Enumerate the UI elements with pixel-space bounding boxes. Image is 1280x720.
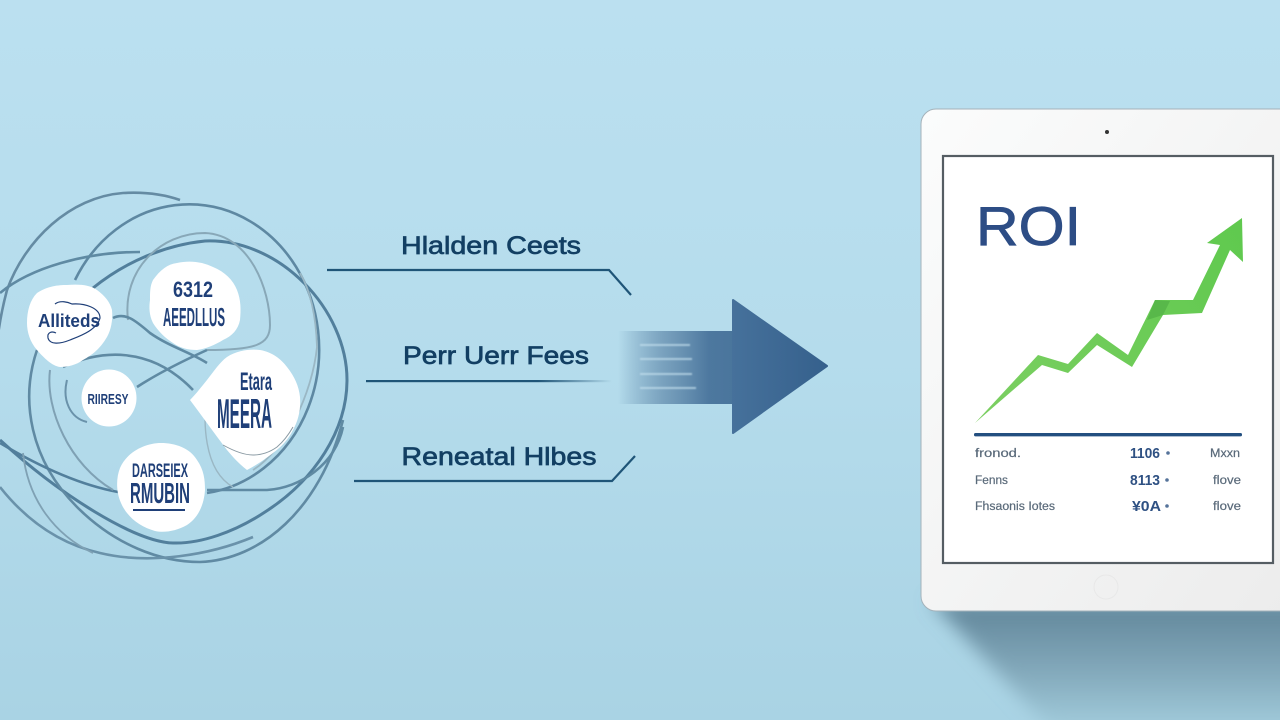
label: renewal hikes: Reneatal Hlbes	[402, 443, 596, 471]
label: hidden costs	[327, 232, 631, 295]
arrow	[605, 300, 827, 433]
bubble: top-centre: AEEDLLUS	[163, 302, 225, 332]
table rule	[974, 433, 1242, 436]
tablet screen	[943, 156, 1273, 563]
label: per user fees: Perr Uerr Fees	[403, 342, 589, 370]
table row 1: 1106	[1130, 445, 1160, 462]
table row 3: Fhsaonis Iotes	[975, 501, 1055, 513]
tablet camera	[1105, 130, 1109, 134]
bubble: top-left	[27, 285, 112, 367]
growth arrow chart	[975, 218, 1243, 423]
table row 2: Fenns	[975, 475, 1008, 487]
label: renewal hikes	[354, 443, 635, 481]
table row 3: ¥0A	[1132, 498, 1161, 515]
ROI heading: ROI	[976, 195, 1081, 257]
tablet home button	[1094, 575, 1118, 599]
bubble: right: Etara	[240, 368, 273, 396]
bubble: top-left: Alliteds	[38, 311, 100, 331]
table row 1: fronod.	[975, 448, 1021, 460]
bubble: bottom: DARSEIEX	[132, 461, 188, 482]
table row 2: 8113	[1130, 472, 1160, 489]
bubble: bottom	[117, 443, 205, 532]
bubble: top-centre	[149, 262, 241, 350]
bubble: small centre: RIIRESY	[88, 391, 128, 408]
table row 2	[975, 472, 1241, 489]
bubble: small centre	[82, 370, 136, 426]
bubble: top-centre: 6312	[173, 277, 213, 302]
table row 2: flove	[1213, 475, 1241, 487]
bubble: bottom: RMUBIN	[130, 478, 190, 510]
tablet	[921, 109, 1280, 611]
bubble: right	[190, 350, 300, 470]
tablet shadow	[930, 600, 1280, 720]
bubble: right: MEERA	[217, 390, 272, 437]
table row 3: flove	[1213, 501, 1241, 513]
tangled rings of costs	[0, 193, 347, 562]
label: hidden costs: Hlalden Ceets	[401, 232, 581, 260]
table row 1: Mxxn	[1210, 448, 1240, 460]
table row 3	[975, 498, 1241, 515]
table row 1	[975, 445, 1240, 462]
